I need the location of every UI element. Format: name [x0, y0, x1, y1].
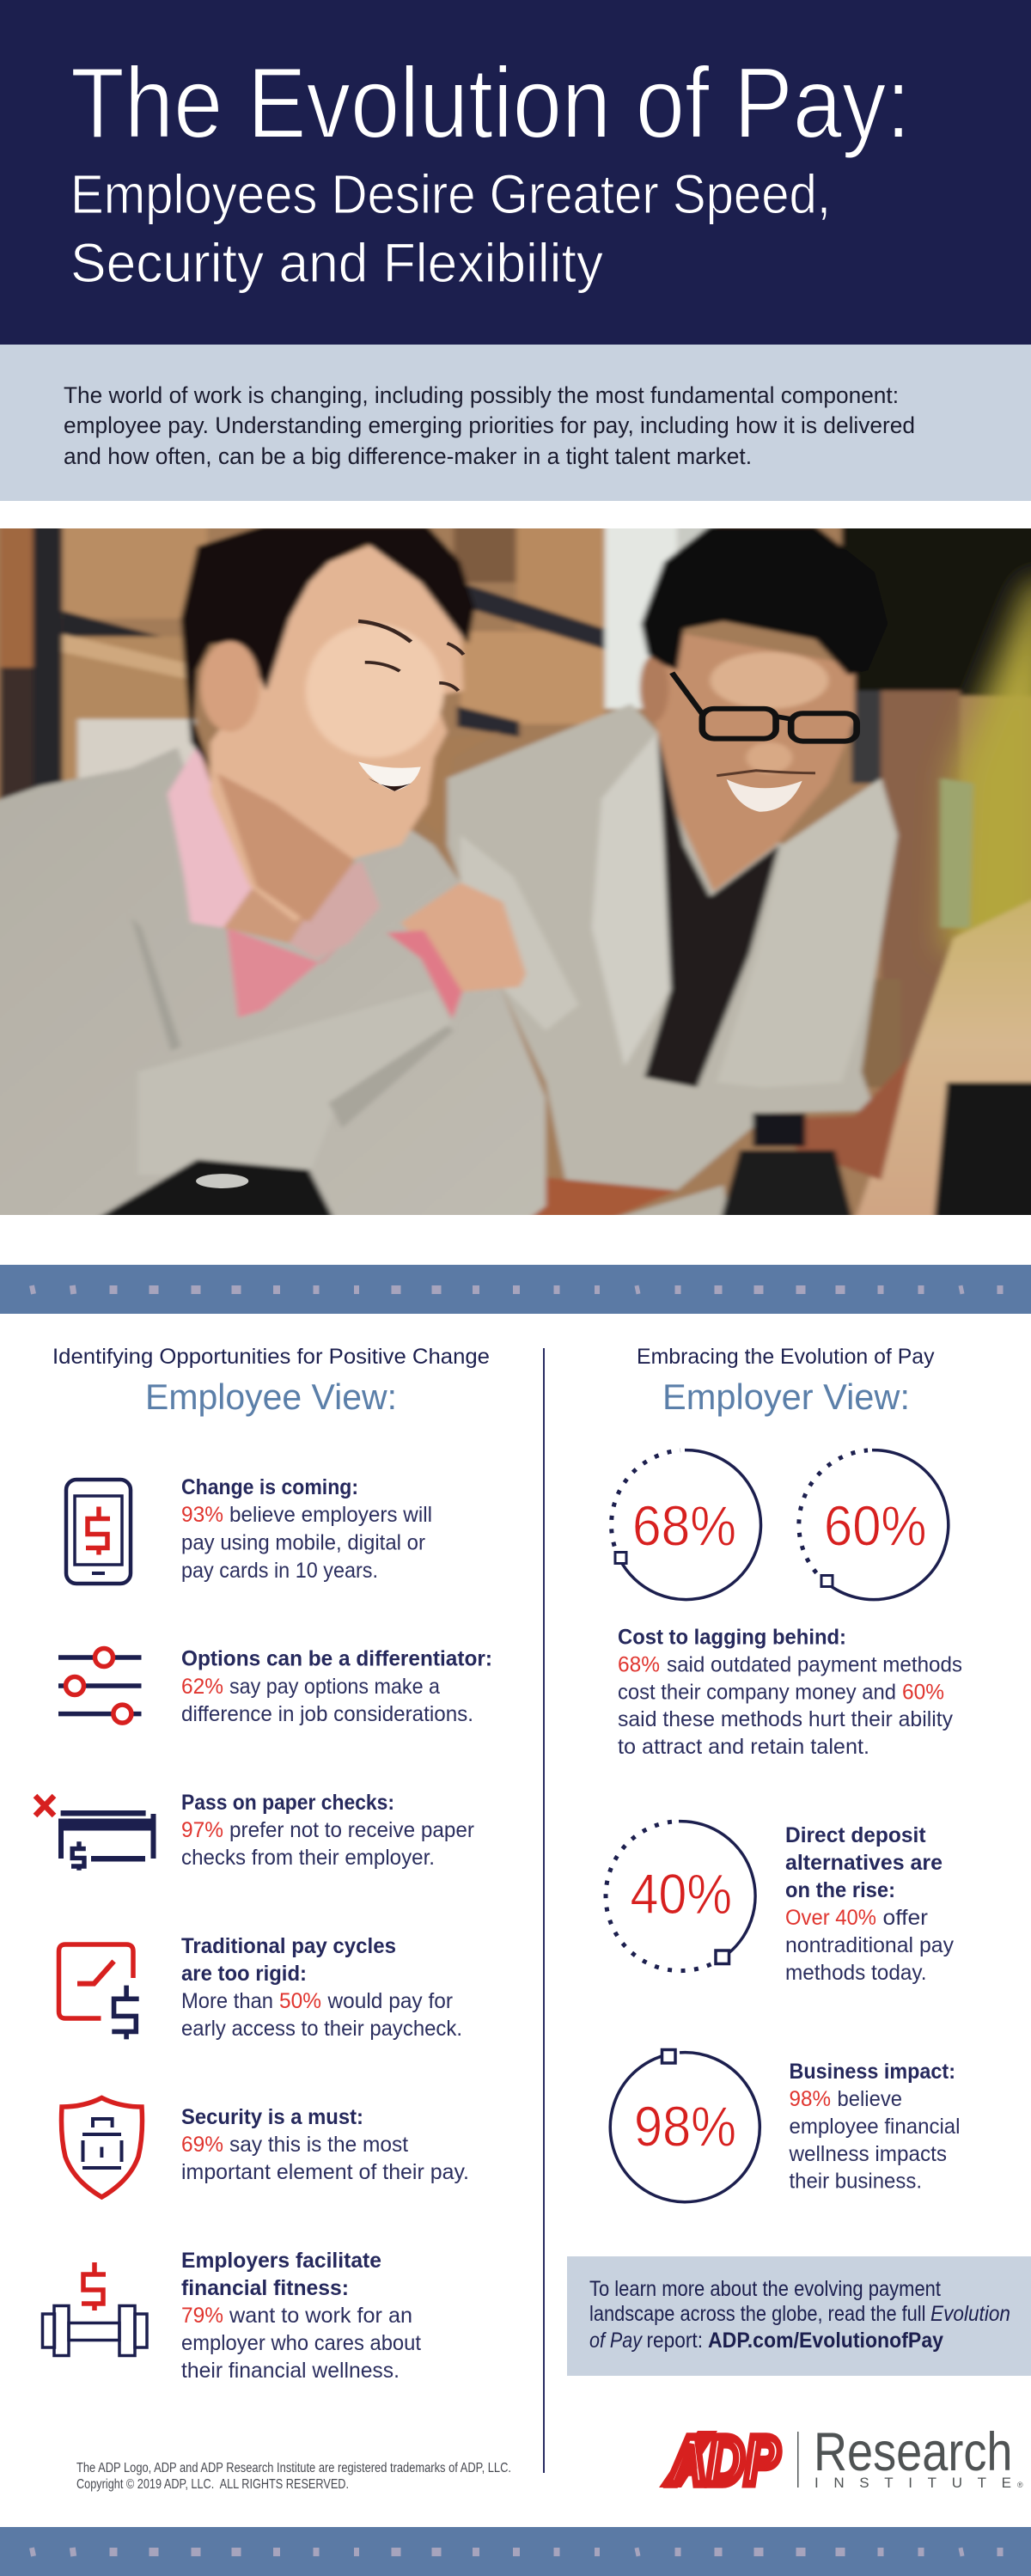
- logo: ADP Research Institute: ®: [1017, 2481, 1023, 2489]
- callout: learn more: Evolution: [930, 2302, 1010, 2326]
- gauge: 40%: [606, 1822, 755, 1971]
- item: paper checks: prefer not to receive paper: [229, 1818, 474, 1842]
- legal text: Copyright © 2019 ADP, LLC. ALL RIGHTS RESERVED.: [76, 2477, 349, 2492]
- icon: pay cycle clock with dollar: [58, 1944, 139, 2039]
- icon: mobile phone with dollar: [66, 1480, 131, 1584]
- employer view heading: Employer View:: [662, 1377, 910, 1417]
- employer view heading: Embracing the Evolution of Pay: [637, 1345, 935, 1369]
- item: direct deposit: alternatives are: [785, 1851, 943, 1875]
- gauge: 68%: [612, 1450, 761, 1600]
- face: [210, 536, 464, 923]
- top dotted band: [0, 1265, 1031, 1314]
- item: direct deposit: methods today.: [785, 1961, 926, 1985]
- title: The Evolution of Pay:: [70, 46, 911, 159]
- item: options: [181, 1646, 492, 1726]
- gauge: 98%: 98%: [634, 2095, 736, 2158]
- item: direct deposit: on the rise:: [785, 1878, 895, 1902]
- icon: shield with lock: [62, 2098, 143, 2197]
- item: cost to lagging behind: cost their company money and: [618, 1681, 896, 1705]
- icon: dumbbell with dollar: [43, 2262, 147, 2356]
- employer view heading: [637, 1345, 935, 1417]
- intro text: and how often, can be a big difference-maker in a tight talent market.: [64, 443, 752, 469]
- item: business impact: [789, 2060, 961, 2193]
- gauge: 60%: 60%: [824, 1493, 926, 1557]
- item: options: 62%: [181, 1675, 223, 1699]
- item: cost to lagging behind: 68%: [618, 1653, 660, 1677]
- item: paper checks: Pass on paper checks:: [181, 1791, 394, 1815]
- logo: ADP Research Institute: INSTITUTE: [814, 2475, 1011, 2491]
- icon: sliders: [58, 1648, 141, 1723]
- callout: learn more: report:: [646, 2329, 703, 2353]
- subtitle: Security and Flexibility: [70, 232, 603, 294]
- item: pay cycles: are too rigid:: [181, 1962, 307, 1986]
- gauge: 40%: 40%: [631, 1862, 732, 1926]
- legal text: The ADP Logo, ADP and ADP Research Institute are registered trademarks of ADP, LLC.: [76, 2461, 511, 2475]
- facial details and glasses: [196, 621, 857, 1188]
- item: financial fitness: Employers facilitate: [181, 2249, 381, 2273]
- item: financial fitness: want to work for an: [229, 2304, 412, 2328]
- item: direct deposit: Over 40%: [785, 1906, 876, 1930]
- gauge: 98%: [610, 2050, 760, 2202]
- panel: employer view: [567, 1345, 1031, 2499]
- item: direct deposit: Direct deposit: [785, 1823, 926, 1847]
- legal text: [76, 2461, 511, 2492]
- item: change is coming: believe employers will: [229, 1503, 432, 1527]
- left man sweater: [0, 748, 546, 1221]
- item: business impact: their business.: [789, 2169, 922, 2193]
- photo: two men laughing at a laptop: [0, 516, 1031, 1236]
- cameras: [92, 1159, 335, 1221]
- item: direct deposit: nontraditional pay: [785, 1933, 954, 1957]
- employee view heading: Employee View:: [145, 1377, 397, 1417]
- item: business impact: employee financial: [789, 2115, 961, 2139]
- table: [534, 1177, 674, 1215]
- item: financial fitness: 79%: [181, 2304, 223, 2328]
- item: cost to lagging behind: said these methods hurt their ability: [618, 1707, 953, 1731]
- gauge: 60%: [799, 1450, 949, 1600]
- item: change is coming: pay using mobile, digital or: [181, 1531, 425, 1555]
- intro text: The world of work is changing, including possibly the most fundamental component:: [64, 382, 899, 408]
- callout: learn more: To learn more about the evolving payment: [589, 2277, 941, 2301]
- icon: crossed-out paper check: [35, 1796, 156, 1871]
- item: pay cycles: Traditional pay cycles: [181, 1934, 396, 1958]
- subtitle: Employees Desire Greater Speed,: [70, 163, 831, 225]
- panel: employee view: [35, 1345, 511, 2492]
- shirt: [227, 928, 342, 1018]
- item: security: 69%: [181, 2133, 223, 2157]
- callout: learn more: of Pay: [589, 2329, 643, 2353]
- item: pay cycles: early access to their paycheck.: [181, 2017, 462, 2041]
- item: financial fitness: financial fitness:: [181, 2276, 349, 2300]
- employee view heading: [52, 1345, 490, 1417]
- item: cost to lagging behind: said outdated payment methods: [667, 1653, 962, 1677]
- logo: ADP Research Institute: [659, 2422, 1023, 2499]
- item: pay cycles: would pay for: [327, 1989, 453, 2013]
- item: cost to lagging behind: [618, 1626, 962, 1759]
- item: paper checks: [181, 1791, 474, 1870]
- item: cost to lagging behind: 60%: [902, 1681, 944, 1705]
- item: pay cycles: More than: [181, 1989, 273, 2013]
- item: direct deposit: offer: [883, 1906, 928, 1930]
- item: business impact: Business impact:: [789, 2060, 955, 2084]
- item: financial fitness: [181, 2249, 421, 2383]
- header panel: [0, 0, 1031, 345]
- item: financial fitness: employer who cares about: [181, 2331, 421, 2355]
- item: cost to lagging behind: Cost to lagging behind:: [618, 1626, 846, 1650]
- callout: learn more: landscape across the globe, read the full: [589, 2302, 926, 2326]
- item: pay cycles: [181, 1934, 462, 2041]
- intro panel: [0, 345, 1031, 501]
- item: business impact: wellness impacts: [789, 2142, 947, 2166]
- item: direct deposit: [785, 1823, 954, 1985]
- logo: ADP Research Institute: ADP: [668, 2422, 779, 2499]
- item: change is coming: Change is coming:: [181, 1475, 358, 1499]
- item: financial fitness: their financial wellness.: [181, 2359, 400, 2383]
- callout: learn more: ADP.com/EvolutionofPay: [708, 2329, 943, 2353]
- item: paper checks: 97%: [181, 1818, 223, 1842]
- right man jacket: [447, 704, 898, 1190]
- item: business impact: 98%: [789, 2087, 831, 2111]
- item: change is coming: [181, 1475, 432, 1583]
- item: paper checks: checks from their employer.: [181, 1846, 435, 1870]
- item: security: important element of their pay.: [181, 2160, 469, 2184]
- intro text: [64, 382, 915, 469]
- item: security: say this is the most: [229, 2133, 408, 2157]
- bottom dotted band: [0, 2527, 1031, 2576]
- item: options: Options can be a differentiator:: [181, 1646, 492, 1670]
- item: pay cycles: 50%: [279, 1989, 321, 2013]
- callout: learn more: [567, 2256, 1031, 2376]
- item: cost to lagging behind: to attract and retain talent.: [618, 1735, 869, 1759]
- item: options: say pay options make a: [229, 1675, 440, 1699]
- item: security: Security is a must:: [181, 2105, 363, 2129]
- column divider: [543, 1348, 545, 2473]
- item: options: difference in job considerations.: [181, 1702, 473, 1726]
- item: change is coming: pay cards in 10 years.: [181, 1559, 378, 1583]
- item: security: [181, 2105, 469, 2184]
- subtitle: [70, 163, 831, 294]
- employee view heading: Identifying Opportunities for Positive Change: [52, 1345, 490, 1369]
- intro text: employee pay. Understanding emerging priorities for pay, including how it is delivered: [64, 412, 915, 438]
- gauge: 68%: 68%: [632, 1493, 736, 1557]
- item: business impact: believe: [837, 2087, 902, 2111]
- item: change is coming: 93%: [181, 1503, 223, 1527]
